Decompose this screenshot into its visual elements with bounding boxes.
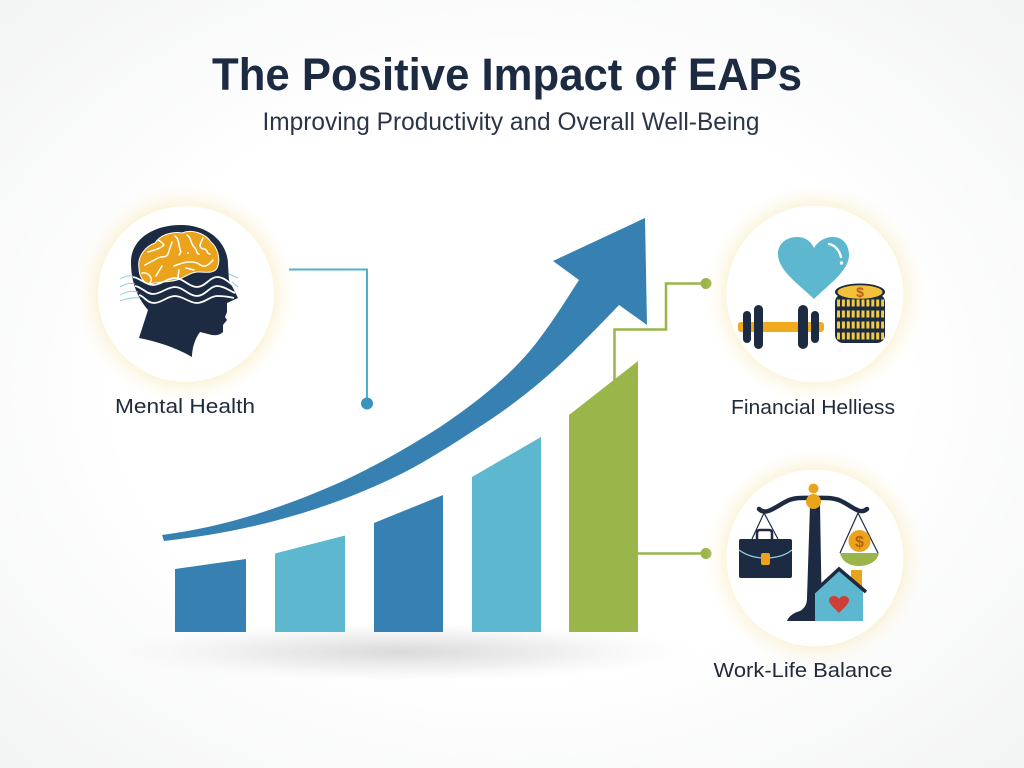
icon: coin stack <box>835 284 885 343</box>
icon: house with heart <box>814 569 866 621</box>
connector: work-life balance <box>638 548 712 559</box>
label: Financial Helliess <box>731 397 895 419</box>
connector: financial wellness <box>614 278 712 381</box>
bar chart <box>175 361 638 632</box>
title: The Positive Impact of EAPs <box>212 49 802 100</box>
icon: scales <box>752 484 878 621</box>
label: Mental Health <box>115 396 255 418</box>
icon: coin stack: $ <box>856 284 864 300</box>
icon: dumbbell <box>738 305 824 349</box>
growth arrow <box>162 218 647 541</box>
label: Work-Life Balance <box>714 660 892 682</box>
icon: heart <box>778 237 849 299</box>
connector: mental health <box>289 270 373 410</box>
subtitle: Improving Productivity and Overall Well-Being <box>262 108 760 136</box>
panel: work-life balance <box>705 448 925 682</box>
panel: financial wellness <box>705 184 925 419</box>
panel: mental health <box>76 184 296 418</box>
chart base shadow <box>100 622 700 682</box>
icon: coin and pan: $ <box>855 534 864 551</box>
wave lines <box>133 277 236 303</box>
icon: head with brain <box>120 225 238 357</box>
icon: briefcase <box>739 530 792 578</box>
icon: coin and pan <box>840 530 879 566</box>
